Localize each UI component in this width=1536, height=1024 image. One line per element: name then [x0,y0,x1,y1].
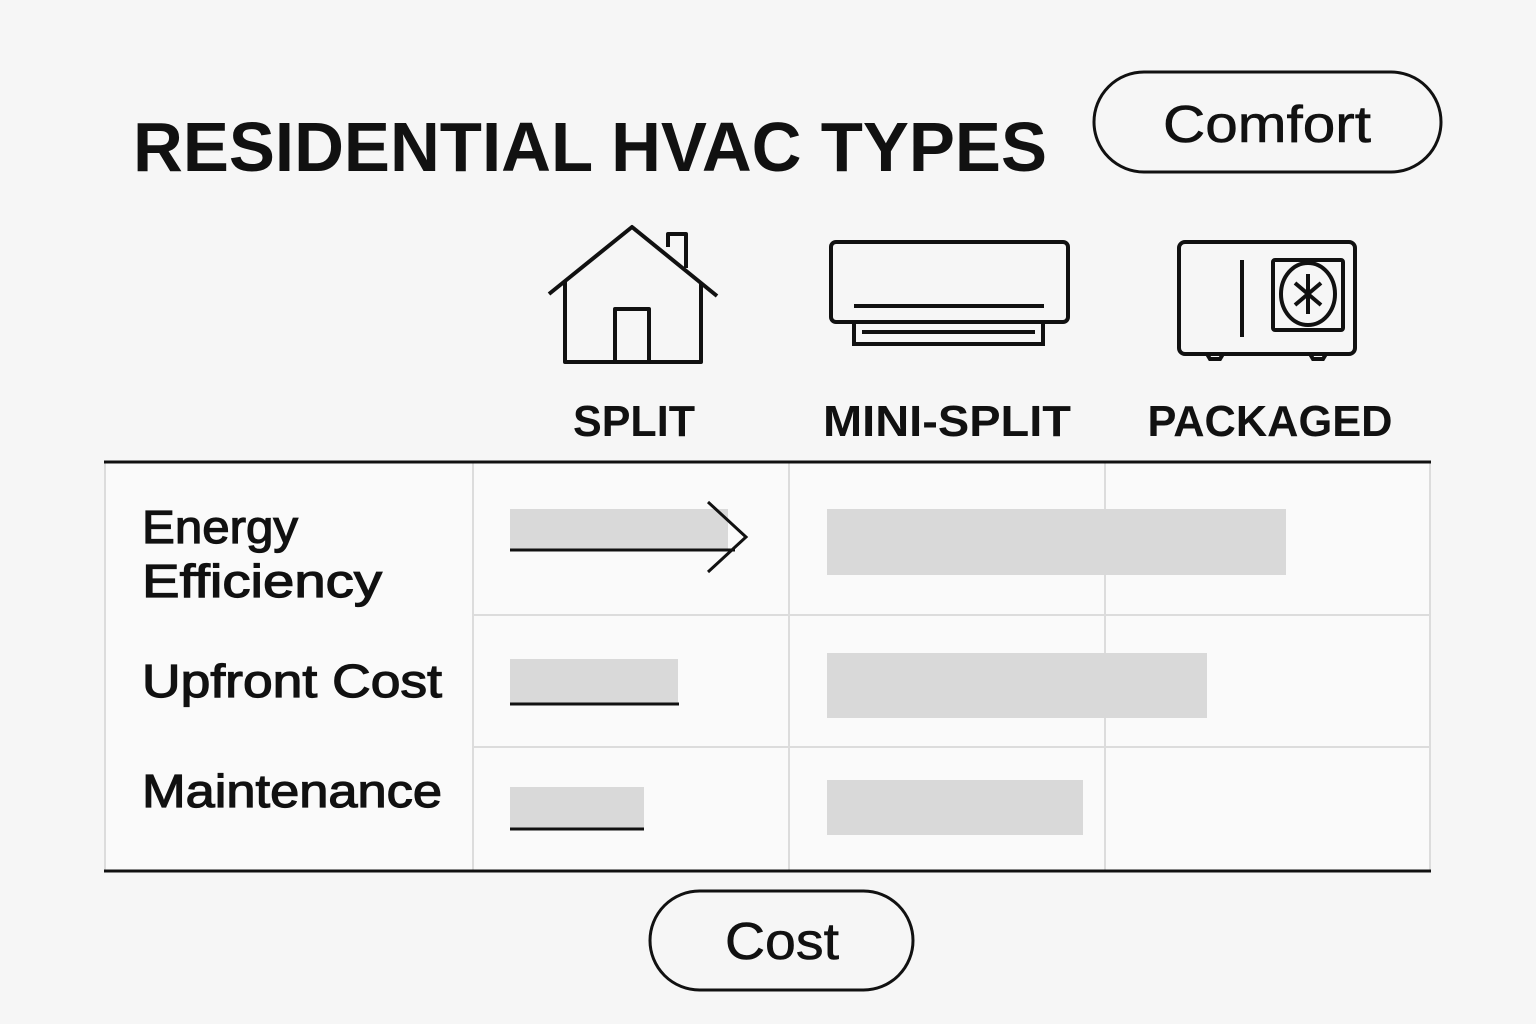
row labels: Upfront Cost [142,655,442,707]
icon: mini-split unit [831,242,1068,344]
row labels [142,501,442,817]
icon: house [549,227,717,362]
pill: cost [650,891,913,990]
row labels: Maintenance [142,765,442,817]
pill: comfort: Comfort [1163,96,1372,154]
row labels: Energy [142,501,298,553]
bars: maintenance [510,780,1083,835]
bars: upfront cost [510,653,1207,718]
column labels: PACKAGED [1148,397,1392,446]
icon: packaged unit [1179,242,1355,359]
title: RESIDENTIAL HVAC TYPES [133,108,1047,186]
comparison table [104,462,1431,871]
column labels [573,397,1392,446]
bars: energy efficiency [510,502,1286,575]
row labels: Efficiency [142,555,382,607]
column labels: SPLIT [573,397,695,446]
column labels: MINI-SPLIT [823,397,1071,446]
pill: cost: Cost [725,913,840,971]
pill: comfort [1094,72,1441,172]
